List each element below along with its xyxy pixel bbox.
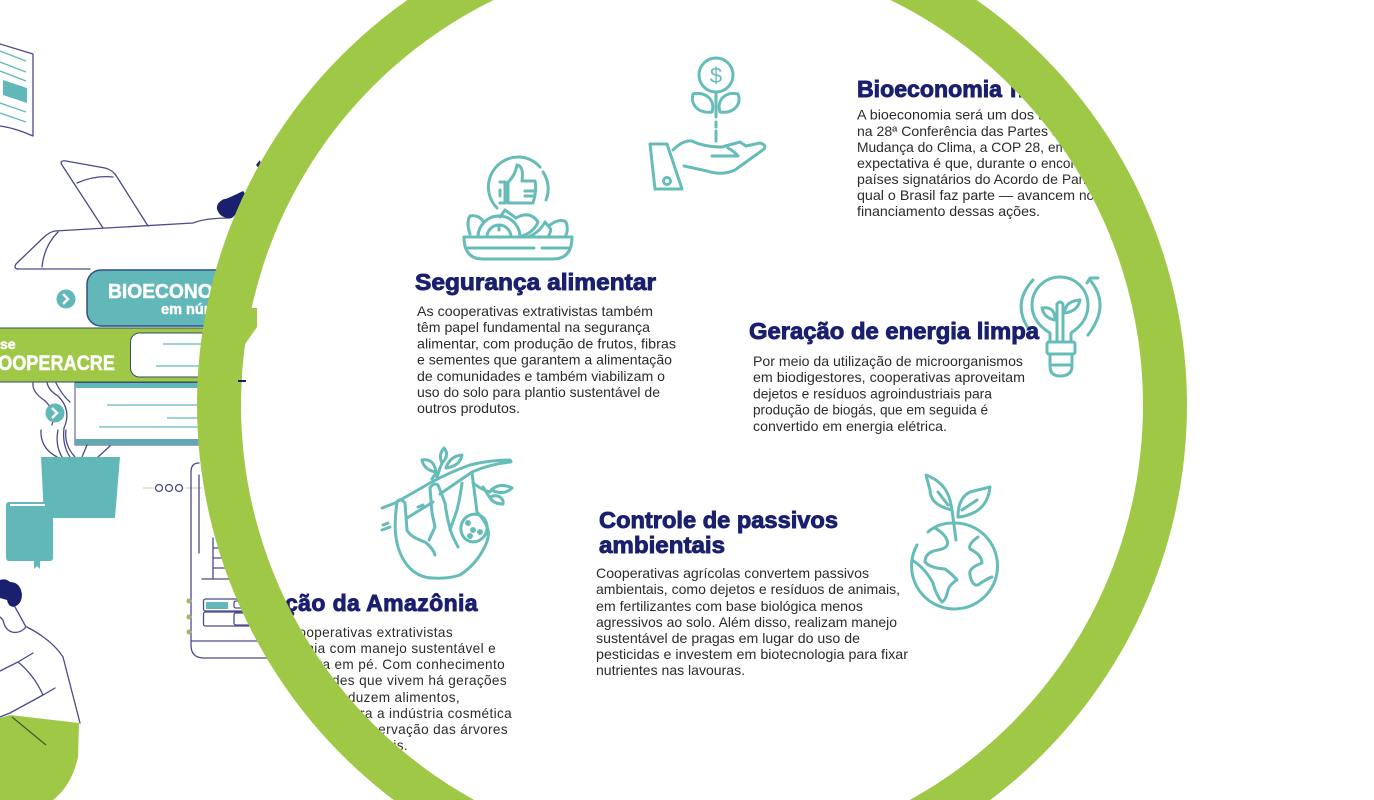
text block: Bioeconomia na COP 28: sobre <box>1052 124 1086 139</box>
text block: Bioeconomia na COP 28: Bioeconomia <box>857 76 1002 102</box>
text block: Preservação da Amazônia: na região, produzem alimentos, <box>259 690 460 705</box>
dark hair shape <box>217 160 262 218</box>
text block: Bioeconomia na COP 28: em Dubai. A <box>1048 140 1123 155</box>
text block: Geração de energia limpa: Por meio da utilização de microorganismos <box>753 354 1023 369</box>
text block: Controle de passivos ambientais: em fertilizantes com base biológica menos <box>596 599 863 614</box>
text block: Segurança alimentar: têm papel fundamental na segurança <box>417 320 650 335</box>
text block: Bioeconomia na COP 28: temas em debate <box>1038 108 1143 122</box>
step dots <box>143 484 202 492</box>
airplane outline <box>15 161 230 269</box>
document page <box>0 44 33 136</box>
text block: Geração de energia limpa: em biodigestores, cooperativas aproveitam <box>753 370 1025 385</box>
icon: hand holding money plant: $ <box>710 63 722 88</box>
left illustration: background scene behind the circle <box>0 44 280 800</box>
navy stub line <box>238 380 246 382</box>
chevron button 1 <box>56 290 76 308</box>
text block: Controle de passivos ambientais: Cooperativas agrícolas convertem passivos <box>596 566 869 581</box>
plant pot <box>41 457 120 518</box>
chevron button 2 <box>46 404 64 422</box>
text block: Segurança alimentar <box>415 269 676 416</box>
icon: light bulb with leaves <box>1021 277 1100 376</box>
text block: Geração de energia limpa <box>749 318 1039 434</box>
text block: Controle de passivos ambientais: nutrientes nas lavouras. <box>596 663 745 678</box>
text block: Segurança alimentar: alimentar, com produção de frutos, fibras <box>417 336 676 351</box>
icon: food bowl with thumbs up <box>464 157 572 259</box>
text block: Preservação da Amazônia: insumos para a indústria cosmética <box>287 706 512 721</box>
text block: Segurança alimentar: uso do solo para plantio sustentável de <box>417 385 660 400</box>
icon: hand holding money plant <box>650 58 765 189</box>
Cooperacre green band: se <box>0 336 16 352</box>
tablet with stacked content <box>186 463 280 658</box>
text block: Geração de energia limpa: dejetos e resíduos agroindustriais para <box>753 386 992 402</box>
text block: Controle de passivos ambientais: sustentável de pragas em lugar do uso de <box>596 631 860 646</box>
text block: Segurança alimentar: e sementes que garantem a alimentação <box>417 353 672 368</box>
text block: Preservação da Amazônia: e garantem a preservação das árvores <box>262 722 508 737</box>
text block: Bioeconomia na COP 28: encontro, os <box>1041 156 1116 171</box>
text block: Preservação da Amazônia: mantêm a floresta em pé. Com conhecimento <box>216 657 505 672</box>
text block: Preservação da Amazônia <box>286 593 512 750</box>
text block: Bioeconomia na COP 28: na 28ª Conferência das Partes <box>857 124 1048 139</box>
bioeconomia em números button: em números <box>161 302 247 318</box>
Cooperacre green band <box>0 328 265 382</box>
text block: Bioeconomia na COP 28: no <box>1079 188 1094 203</box>
text block: Segurança alimentar: outros produtos. <box>417 401 520 416</box>
text block: Preservação da Amazônia: Preservação da Amazônia <box>185 590 478 616</box>
text block: Controle de passivos ambientais: ambientais, como dejetos e resíduos de animais, <box>596 582 900 597</box>
text block: Bioeconomia na COP 28: Mudança do Clima, a COP 28, <box>857 140 1044 155</box>
text block: Geração de energia limpa: Geração de energia limpa <box>749 318 1039 344</box>
ring bump <box>236 305 257 350</box>
icon: globe with sprout <box>912 475 998 609</box>
white disc content clipped to the circle <box>241 56 1102 750</box>
text block: Geração de energia limpa: convertido em energia elétrica. <box>753 419 947 434</box>
text block: Bioeconomia na COP 28: expectativa é que, durante o <box>857 156 1037 171</box>
person <box>0 579 80 800</box>
hanging plant leaves <box>33 382 110 457</box>
text block: Bioeconomia na COP 28: A bioeconomia será um dos <box>857 108 1034 122</box>
icon: sloth on a branch <box>382 448 512 578</box>
text block: Bioeconomia na COP 28: financiamento dessas ações. <box>857 204 1040 219</box>
text block: Preservação da Amazônia: e dos animais. <box>315 738 408 753</box>
text block: Controle de passivos ambientais: agressivos ao solo. Além disso, realizam manejo <box>596 615 897 630</box>
text block: Preservação da Amazônia: protegem a Amazônia com manejo sustentável e <box>187 641 496 656</box>
text block: Controle de passivos ambientais <box>596 507 908 678</box>
text block: Preservação da Amazônia: As cooperativas extrativistas <box>271 625 453 640</box>
closed book <box>6 502 53 569</box>
green ring <box>197 0 1187 800</box>
teal-topped panel <box>75 383 265 445</box>
text block: Bioeconomia na COP 28 <box>857 80 1093 219</box>
text block: Preservação da Amazônia: das comunidades que vivem há gerações <box>243 673 507 688</box>
text block: Bioeconomia na COP 28: Paris — do <box>1062 172 1129 187</box>
text block: Bioeconomia na COP 28: na COP 28 <box>1010 76 1125 102</box>
text block: Controle de passivos ambientais: pesticidas e investem em biotecnologia para fixar <box>596 647 908 662</box>
bioeconomia em números button <box>87 270 267 326</box>
text block: Bioeconomia na COP 28: países signatários do Acordo de <box>857 172 1058 187</box>
bioeconomia em números button: BIOECONOMIA <box>108 281 248 303</box>
text block: Controle de passivos ambientais: ambientais <box>599 532 725 558</box>
text block: Controle de passivos ambientais: Controle de passivos <box>599 507 838 533</box>
text block: Geração de energia limpa: produção de biogás, que em seguida é <box>753 402 988 418</box>
text block: Bioeconomia na COP 28: qual o Brasil faz parte — avancem <box>857 188 1075 203</box>
text block: Segurança alimentar: de comunidades e também viabilizam o <box>417 369 665 384</box>
text block: Segurança alimentar: As cooperativas extrativistas também <box>417 304 653 319</box>
text block: Segurança alimentar: Segurança alimentar <box>415 269 656 295</box>
